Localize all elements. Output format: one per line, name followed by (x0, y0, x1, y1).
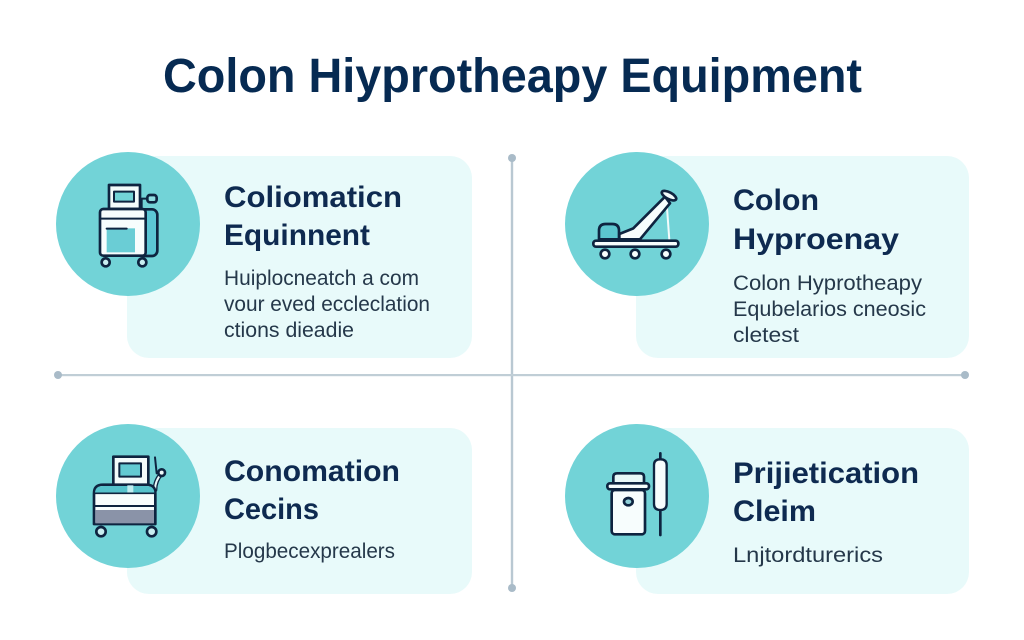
vertical divider (508, 154, 516, 592)
body text: ctions dieadie (224, 319, 354, 342)
panel: top right (565, 152, 969, 358)
body text: cletest (733, 324, 799, 347)
card background (636, 156, 969, 358)
icon: treatment unit (94, 457, 165, 536)
icon circle (56, 424, 200, 568)
icon: tilt table (593, 189, 678, 258)
body text (733, 272, 926, 347)
body text: Plogbecexprealers (224, 540, 395, 563)
body text: Colon Hyprotheapy (733, 272, 923, 295)
body text: vour eved eccleclation (224, 293, 430, 316)
body text: Huiplocneatch a com (224, 267, 419, 290)
heading line 2: Cecins (224, 493, 319, 526)
icon circle (565, 424, 709, 568)
horizontal divider (54, 371, 969, 379)
body text: Equbelarios cneosic (733, 298, 926, 321)
heading: Prijietication (733, 457, 919, 490)
heading line 2: Equinnent (224, 219, 370, 252)
card background (127, 156, 472, 358)
icon circle (565, 152, 709, 296)
heading: Colon (733, 184, 819, 217)
panel: bottom right (565, 424, 969, 594)
body text: Lnjtordturerics (733, 544, 883, 567)
icon: container and probe (607, 453, 667, 535)
card background (127, 428, 472, 594)
panel: bottom left (56, 424, 472, 594)
heading: Coliomaticn (224, 181, 402, 214)
heading line 2: Hyproenay (733, 223, 899, 256)
panel: top left (56, 152, 472, 358)
icon: equipment cart (100, 185, 157, 266)
heading: Conomation (224, 455, 400, 488)
card background (636, 428, 969, 594)
body text (224, 267, 430, 342)
heading line 2: Cleim (733, 495, 816, 528)
title: Colon Hiyprotheapy Equipment (163, 50, 862, 103)
icon circle (56, 152, 200, 296)
